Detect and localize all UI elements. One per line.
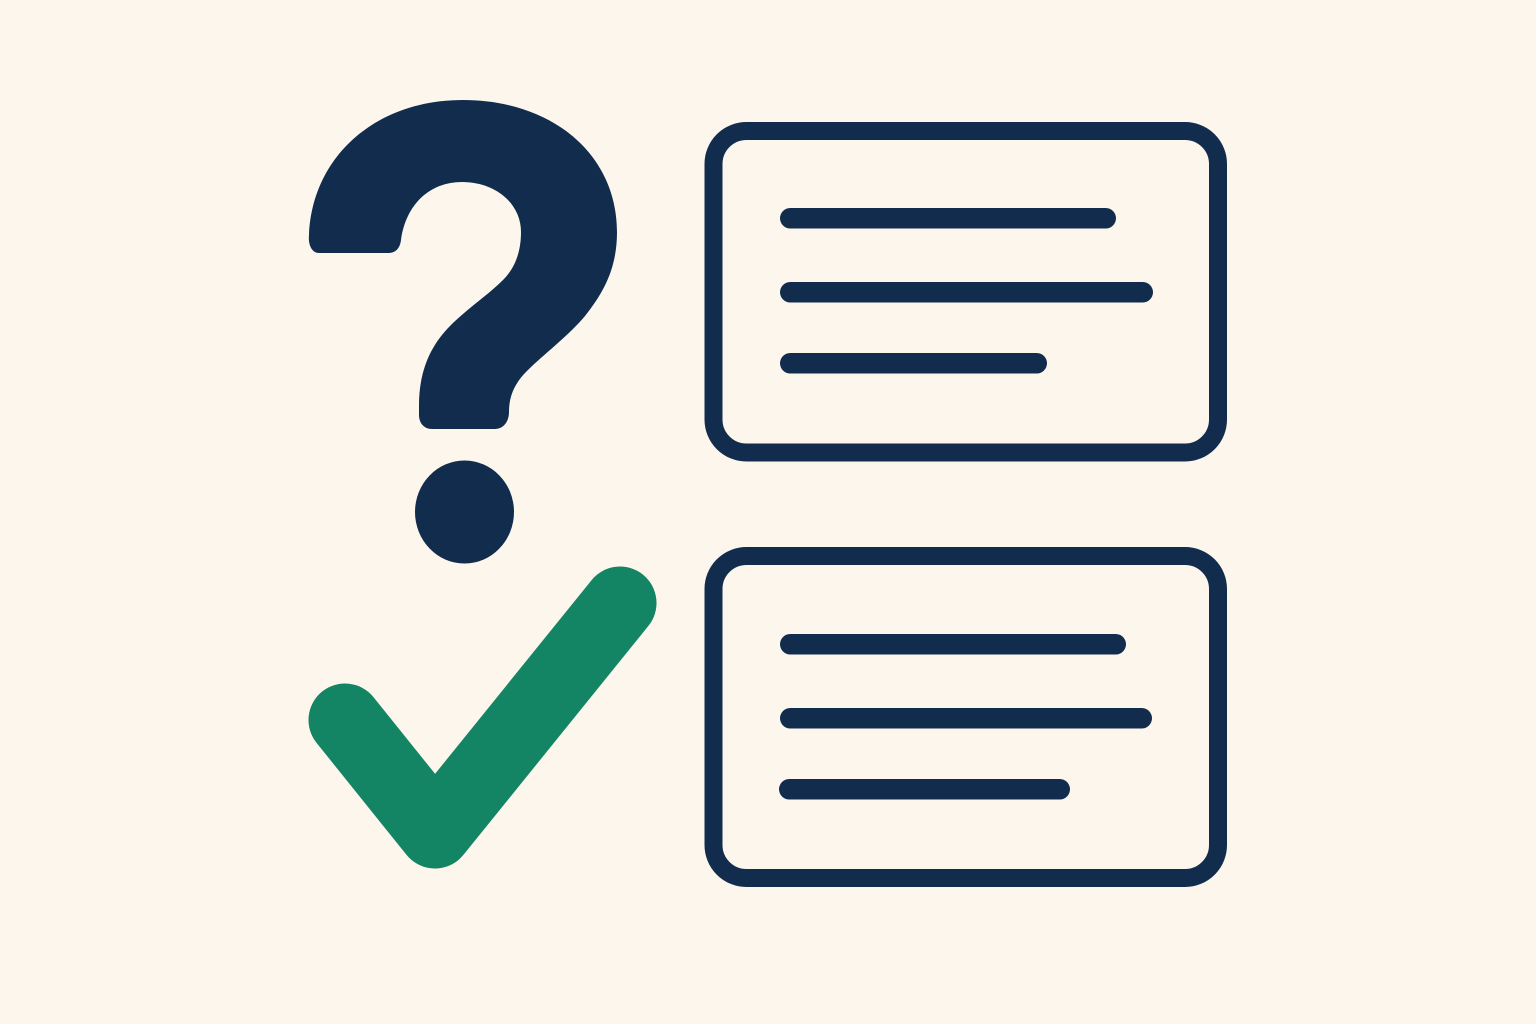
icon: question mark [309, 100, 617, 564]
lower card text lines [779, 634, 1152, 800]
panel: lower card [714, 556, 1218, 878]
upper card text lines [780, 208, 1153, 374]
panel: upper card [714, 131, 1218, 452]
icon: check mark [345, 603, 620, 832]
